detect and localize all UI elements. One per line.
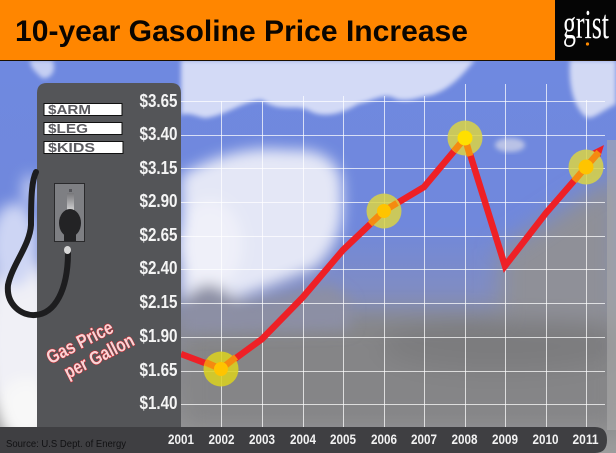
x-axis labels: 2007 — [411, 431, 437, 447]
y-axis labels: $1.40 — [140, 393, 178, 413]
label: $KIDS — [44, 141, 123, 155]
label: $LEG — [44, 122, 122, 136]
source note: Source: U.S Dept. of Energy — [6, 439, 126, 450]
title: 10-year Gasoline Price Increase — [15, 15, 468, 48]
label: $ARM — [44, 103, 122, 117]
y-axis labels — [140, 91, 178, 413]
y-axis labels: $2.90 — [140, 191, 178, 211]
y-axis labels: $3.40 — [140, 124, 178, 144]
x-axis labels — [168, 431, 599, 447]
x-axis labels: 2002 — [208, 431, 235, 447]
x-axis labels: 2004 — [290, 431, 316, 447]
label: $LEG: $LEG — [48, 122, 88, 136]
header bar — [0, 0, 616, 61]
x-axis labels: 2001 — [168, 431, 194, 447]
axis title: gas price per gallon — [43, 312, 138, 388]
label: $KIDS: $KIDS — [48, 141, 95, 155]
axis title: gas price per gallon: per Gallon — [61, 330, 138, 383]
y-axis labels: $2.65 — [140, 225, 178, 245]
chart grid — [181, 84, 605, 427]
highlight: 2002 — [204, 352, 238, 386]
x-axis labels: 2003 — [249, 431, 275, 447]
x-axis labels: 2005 — [330, 431, 356, 447]
x-axis labels: 2011 — [572, 431, 599, 447]
highlight: 2008 — [448, 120, 482, 156]
highlight: 2006 — [366, 194, 402, 228]
icon: pump nozzle — [54, 184, 84, 242]
bottom bar — [0, 427, 607, 453]
gas price line — [181, 138, 604, 369]
x-axis labels: 2008 — [452, 431, 478, 447]
pump panel — [37, 83, 181, 427]
y-axis labels: $3.65 — [140, 91, 178, 111]
y-axis labels: $2.40 — [140, 258, 178, 278]
y-axis labels: $3.15 — [140, 158, 178, 178]
x-axis labels: 2010 — [532, 431, 559, 447]
y-axis labels: $1.90 — [140, 326, 178, 346]
y-axis labels: $1.65 — [140, 360, 178, 380]
logo: grist — [555, 0, 616, 60]
x-axis labels: 2006 — [371, 431, 397, 447]
label: $ARM: $ARM — [48, 103, 91, 117]
x-axis labels: 2009 — [492, 431, 518, 447]
highlight: 2011 — [568, 150, 604, 184]
icon: pump hose — [8, 172, 71, 315]
y-axis labels: $2.15 — [140, 292, 178, 312]
axis title: gas price per gallon: Gas Price — [43, 317, 117, 369]
